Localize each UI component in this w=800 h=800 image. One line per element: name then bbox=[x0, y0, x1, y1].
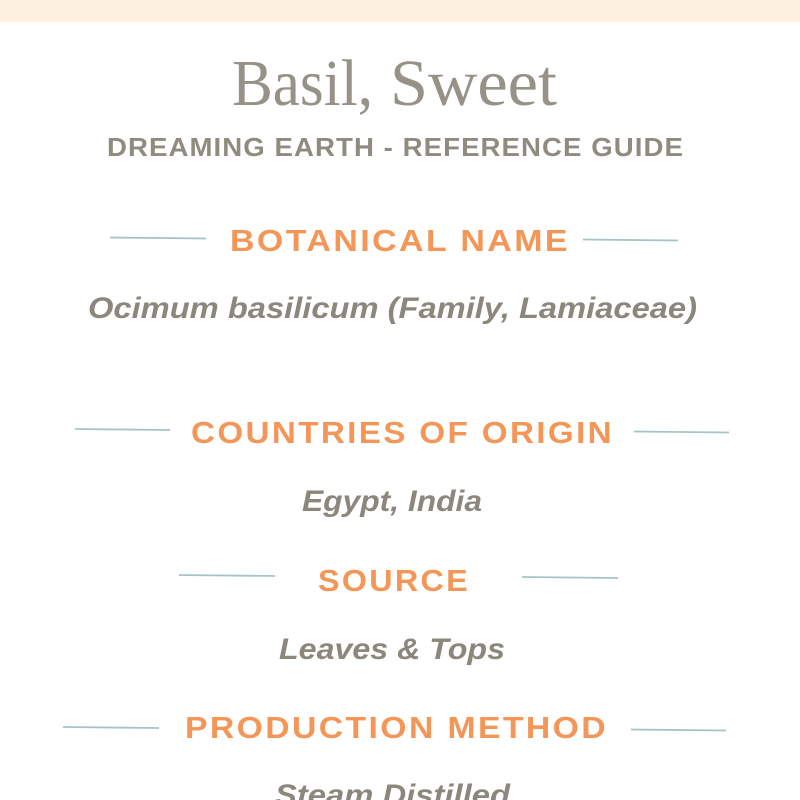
heading: botanical name: BOTANICAL NAME bbox=[230, 223, 570, 258]
heading: countries of origin: COUNTRIES OF ORIGIN bbox=[191, 415, 614, 450]
top banner bbox=[0, 0, 800, 22]
title: Sweet bbox=[390, 47, 557, 120]
divider: source right bbox=[522, 577, 618, 578]
heading: production method: PRODUCTION METHOD bbox=[185, 710, 608, 745]
divider: production left bbox=[63, 727, 159, 728]
heading: source: SOURCE bbox=[318, 563, 470, 598]
subtitle: DREAMING EARTH - REFERENCE GUIDE bbox=[107, 132, 684, 162]
section: botanical name bbox=[88, 223, 697, 325]
divider: botanical name right bbox=[583, 240, 678, 241]
text: botanical name value: Ocimum basilicum (Family, Lamiaceae) bbox=[88, 292, 697, 325]
title: Basil, bbox=[232, 47, 373, 120]
divider: production right bbox=[631, 730, 726, 731]
section: countries of origin bbox=[75, 415, 729, 518]
divider: countries right bbox=[634, 432, 729, 433]
section: source bbox=[179, 563, 618, 666]
title bbox=[232, 47, 557, 120]
text: source value: Leaves & Tops bbox=[279, 633, 505, 666]
divider: source left bbox=[179, 575, 275, 576]
divider: countries left bbox=[75, 429, 170, 430]
text: countries value: Egypt, India bbox=[302, 485, 482, 518]
divider: botanical name left bbox=[110, 238, 206, 239]
section: production method bbox=[63, 710, 726, 800]
